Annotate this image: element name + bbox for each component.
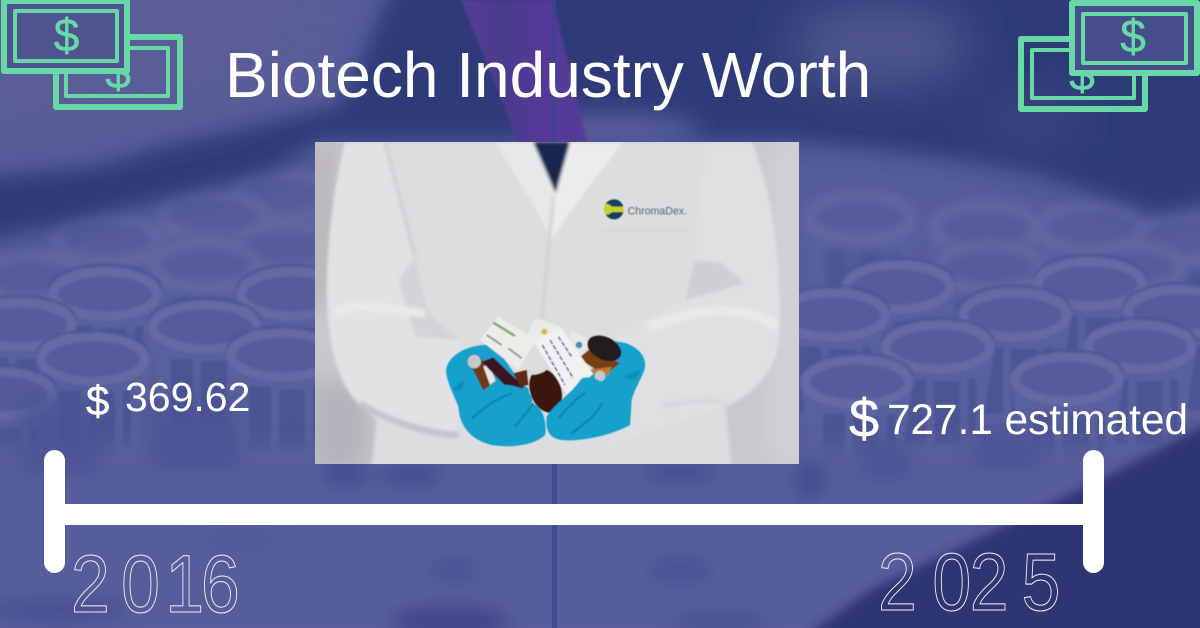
- icon: money bills right: $: [1120, 10, 1146, 62]
- title: Biotech Industry Worth: [225, 39, 871, 111]
- timeline bar: [44, 450, 1104, 573]
- dark upper band: [0, 0, 1200, 245]
- logo mark: ChromaDex.: [628, 205, 687, 217]
- bottles: [470, 357, 496, 391]
- icon: money bills right: $: [1069, 48, 1095, 100]
- icon: money bills left: $: [105, 46, 131, 98]
- collar and tie: [495, 142, 556, 240]
- icon: money bills right: [1021, 3, 1197, 109]
- blurry rear vials: [0, 166, 1200, 385]
- year 2025: 2025: [878, 537, 1060, 628]
- paper labels rear: [527, 318, 562, 343]
- icon: money bills left: [4, 1, 180, 107]
- value 2025: $: [849, 389, 879, 449]
- icon: money bills left: $: [54, 9, 79, 61]
- glove fronts: [458, 385, 546, 446]
- lower blurred field: [0, 395, 1200, 628]
- year 2016: 2016: [71, 539, 240, 628]
- dark corner: [800, 420, 1200, 628]
- value 2016: 369.62: [125, 374, 250, 420]
- purple stripe: [461, 0, 587, 142]
- logo mark: [604, 199, 687, 219]
- value 2025: [849, 389, 1188, 449]
- front label: [533, 328, 593, 394]
- glove backs: [446, 345, 532, 407]
- coat: [327, 142, 780, 467]
- value 2025: 727.1 estimated: [887, 396, 1188, 443]
- photo: scientist holding medicine bottles: [308, 140, 802, 473]
- front vials: [0, 255, 1200, 502]
- value 2016: $: [86, 377, 109, 424]
